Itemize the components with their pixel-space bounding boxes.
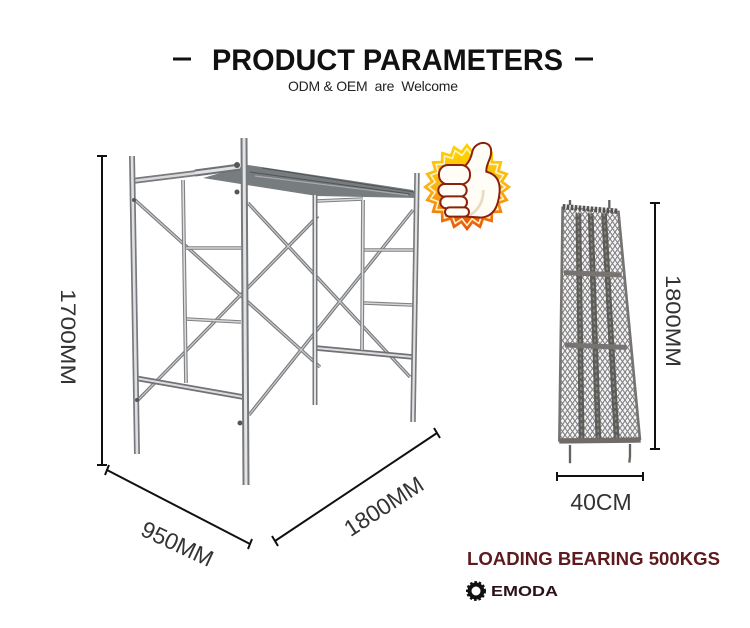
- logo gear icon: [467, 582, 485, 600]
- title: PRODUCT PARAMETERS: [212, 44, 563, 77]
- logo wordmark: EMODA: [491, 583, 558, 600]
- dimension: plank width 40CM: 40CM: [570, 489, 632, 515]
- scaffold rungs and rails: [132, 167, 414, 397]
- dimension: plank length 1800MM: [650, 203, 684, 449]
- scaffold frame illustration: [132, 138, 418, 485]
- dimension: plank width 40CM: [557, 472, 643, 515]
- dimension: plank length 1800MM: 1800MM: [661, 275, 684, 367]
- dimension: depth 950MM: [105, 465, 252, 572]
- scaffold lock pins: [132, 162, 242, 426]
- dimension: height 1700MM: 1700MM: [56, 289, 79, 385]
- icon: thumb hand: [438, 143, 500, 218]
- starburst: [423, 143, 511, 231]
- subtitle: ODM & OEM are Welcome: [288, 78, 458, 94]
- dimension: height 1700MM: [56, 156, 107, 465]
- icon: thumbs up badge: [423, 143, 511, 231]
- scaffold deck platform: [203, 165, 418, 198]
- scaffold vertical posts: [132, 138, 417, 485]
- plank hooks: [570, 200, 630, 463]
- plank mesh: [559, 207, 640, 443]
- dimension: depth 950MM: 950MM: [137, 516, 218, 572]
- dimension: width 1800MM: 1800MM: [339, 471, 428, 542]
- scaffold cross braces: [135, 200, 413, 415]
- plank frame: [559, 207, 640, 442]
- brand logo: [467, 582, 558, 600]
- load capacity label: LOADING BEARING 500KGS: [467, 549, 720, 569]
- dimension: width 1800MM: [272, 428, 440, 546]
- plank longitudinal beams: [578, 213, 617, 438]
- scaffold plank illustration: [559, 200, 641, 463]
